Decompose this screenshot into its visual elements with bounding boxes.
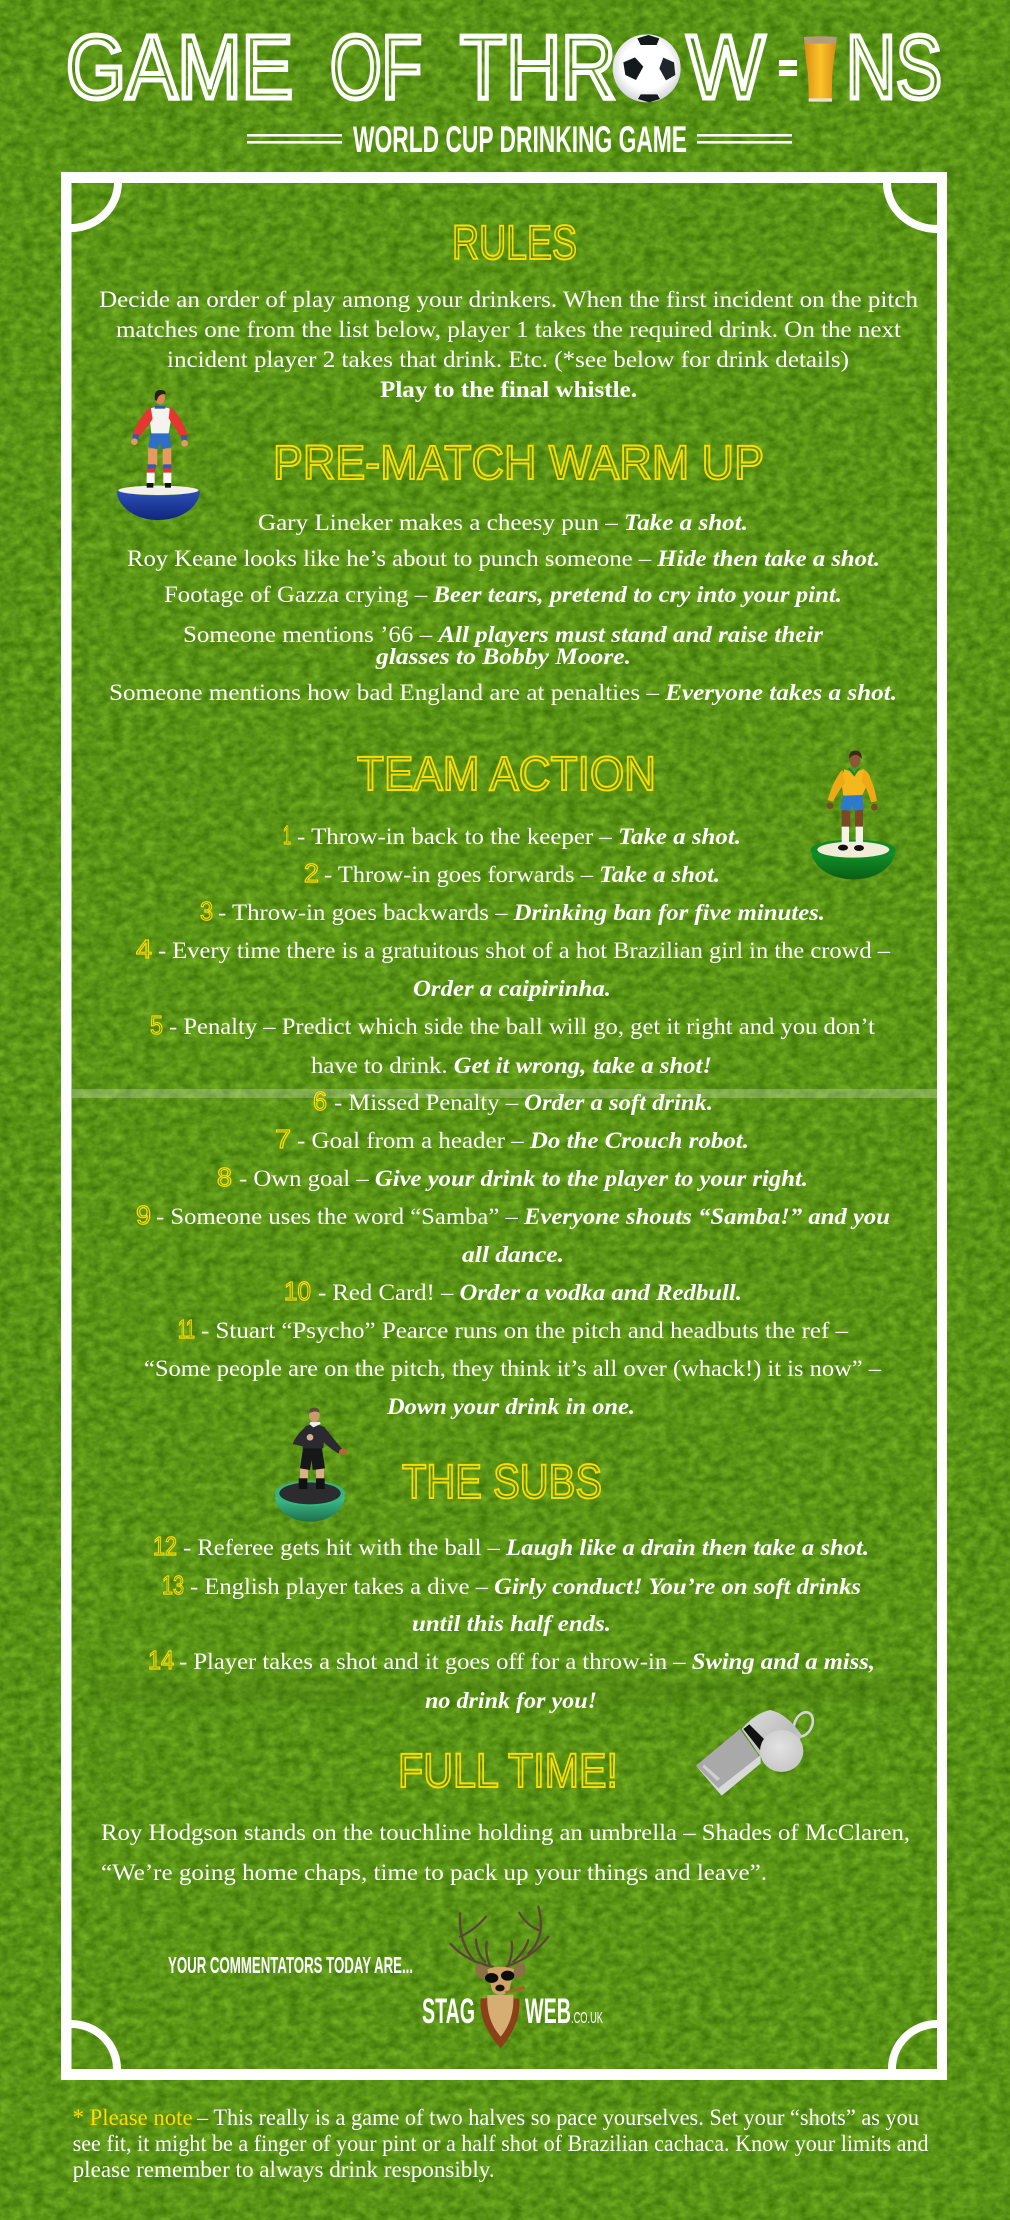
- team action list: [136, 820, 890, 1420]
- icon: stag head: [451, 1907, 548, 2048]
- team action list: 2: [304, 858, 319, 888]
- heading: rules: RULES: [452, 217, 577, 270]
- section: the subs: [148, 1456, 875, 1714]
- icon: pint of beer: [804, 36, 837, 102]
- rules text: Decide an order of play among your drinkers. When the first incident on the pitch: [99, 287, 918, 313]
- subs list: 13: [162, 1570, 184, 1600]
- team action list: “Some people are on the pitch, they think it’s all over (whack!) it is now” –: [144, 1356, 881, 1382]
- footnote: please remember to always drink responsibly.: [73, 2157, 495, 2183]
- subs list: - Player takes a shot and it goes off for a throw-in – Swing and a miss,: [179, 1649, 875, 1675]
- section: rules: [99, 217, 918, 403]
- team action list: all dance.: [462, 1242, 564, 1268]
- logo text: [422, 1992, 603, 2031]
- team action list: 5: [150, 1010, 163, 1040]
- subs list: - Referee gets hit with the ball – Laugh like a drain then take a shot.: [183, 1535, 869, 1561]
- heading: full time: FULL TIME!: [398, 1745, 618, 1798]
- footnote: see fit, it might be a finger of your pint or a half shot of Brazilian cachaca. Know your limits and: [73, 2131, 929, 2157]
- team action list: 3: [200, 896, 213, 926]
- team action list: 6: [313, 1086, 327, 1116]
- section: team action: [136, 748, 890, 1420]
- panel: pitch frame: [61, 172, 947, 2080]
- section: pre-match warm up: [109, 437, 897, 706]
- team action list: - Missed Penalty – Order a soft drink.: [334, 1090, 713, 1116]
- icon: football: [613, 34, 681, 102]
- heading: the subs: THE SUBS: [402, 1456, 602, 1509]
- title: GAME: [66, 18, 293, 118]
- pre-match list: glasses to Bobby Moore.: [375, 644, 631, 670]
- title: W: [687, 18, 765, 118]
- heading: team action: TEAM ACTION: [357, 748, 656, 801]
- team action list: 8: [217, 1162, 232, 1192]
- subs list: - English player takes a dive – Girly conduct! You’re on soft drinks: [190, 1574, 861, 1600]
- team action list: Down your drink in one.: [386, 1394, 635, 1420]
- team action list: Order a caipirinha.: [413, 976, 611, 1002]
- footnote: * Please note: [73, 2105, 193, 2131]
- team action list: 4: [136, 934, 152, 964]
- team action list: - Someone uses the word “Samba” – Everyone shouts “Samba!” and you: [156, 1204, 890, 1230]
- title hyphen: [779, 60, 797, 76]
- icon: subbuteo referee: [275, 1408, 347, 1522]
- subs list: 14: [148, 1645, 174, 1675]
- logo text: .CO.UK: [571, 2010, 603, 2027]
- subs list: until this half ends.: [412, 1611, 611, 1637]
- full time text: “We’re going home chaps, time to pack up your things and leave”.: [101, 1860, 767, 1886]
- logo text: WEB: [525, 1992, 571, 2031]
- pre-match list: Footage of Gazza crying – Beer tears, pretend to cry into your pint.: [164, 582, 842, 608]
- team action list: - Goal from a header – Do the Crouch robot.: [297, 1128, 749, 1154]
- heading: pre-match warm up: PRE-MATCH WARM UP: [273, 437, 764, 490]
- rules text: Play to the final whistle.: [380, 377, 637, 403]
- section: full time: [101, 1745, 910, 1886]
- team action list: - Stuart “Psycho” Pearce runs on the pitch and headbuts the ref –: [201, 1318, 848, 1344]
- team action list: - Throw-in back to the keeper – Take a shot.: [297, 824, 741, 850]
- rules text: [99, 287, 918, 403]
- team action list: 11: [178, 1314, 195, 1344]
- title: NS: [846, 18, 942, 118]
- pre-match list: Roy Keane looks like he’s about to punch someone – Hide then take a shot.: [127, 546, 880, 572]
- logo text: STAG: [422, 1992, 475, 2031]
- subs list: no drink for you!: [425, 1688, 597, 1714]
- pre-match list: Someone mentions ’66 – All players must stand and raise their: [183, 622, 824, 648]
- team action list: - Red Card! – Order a vodka and Redbull.: [318, 1280, 742, 1306]
- pre-match list: Someone mentions how bad England are at penalties – Everyone takes a shot.: [109, 680, 897, 706]
- subtitle: WORLD CUP DRINKING GAME: [353, 119, 687, 160]
- footnote: [73, 2105, 929, 2183]
- team action list: have to drink. Get it wrong, take a shot!: [311, 1053, 712, 1079]
- team action list: - Own goal – Give your drink to the player to your right.: [239, 1166, 808, 1192]
- icon: subbuteo player red and white: [117, 390, 200, 520]
- team action list: 10: [284, 1276, 311, 1306]
- team action list: 7: [275, 1124, 291, 1154]
- icon: whistle: [696, 1709, 817, 1796]
- team action list: 9: [136, 1200, 151, 1230]
- full time text: Roy Hodgson stands on the touchline holding an umbrella – Shades of McClaren,: [101, 1820, 910, 1846]
- icon: subbuteo player brazil: [811, 751, 896, 879]
- team action list: - Throw-in goes forwards – Take a shot.: [324, 862, 720, 888]
- title: [66, 18, 942, 118]
- rules text: incident player 2 takes that drink. Etc. (*see below for drink details): [167, 347, 849, 373]
- logo: stag web: [422, 1907, 603, 2048]
- pre-match list: Gary Lineker makes a cheesy pun – Take a shot.: [258, 510, 748, 536]
- title: OF: [330, 18, 422, 118]
- title: THR: [460, 18, 616, 118]
- footnote: – This really is a game of two halves so pace yourselves. Set your “shots” as you: [196, 2105, 919, 2131]
- team action list: - Throw-in goes backwards – Drinking ban for five minutes.: [218, 900, 825, 926]
- full time text: [101, 1820, 910, 1886]
- subs list: 12: [153, 1531, 177, 1561]
- team action list: - Every time there is a gratuitous shot of a hot Brazilian girl in the crowd –: [158, 938, 890, 964]
- commentators label: YOUR COMMENTATORS TODAY ARE...: [168, 1952, 413, 1978]
- pre-match list: [109, 510, 897, 706]
- rules text: matches one from the list below, player 1 takes the required drink. On the next: [116, 317, 901, 343]
- team action list: 1: [283, 820, 291, 850]
- team action list: - Penalty – Predict which side the ball will go, get it right and you don’t: [169, 1014, 875, 1040]
- subs list: [148, 1531, 875, 1714]
